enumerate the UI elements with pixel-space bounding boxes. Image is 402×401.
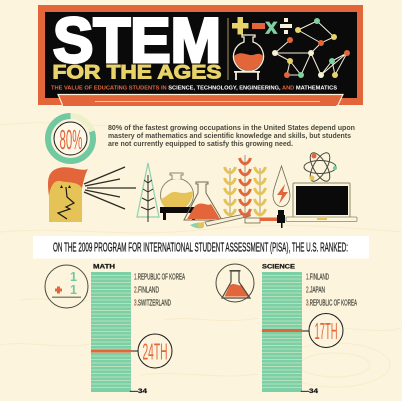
science label: SCIENCE	[262, 264, 296, 270]
paragraph: 80% of the fastest growing occupations in the United States depend upon	[108, 125, 355, 132]
science top three	[306, 272, 357, 308]
math rank callout: 24TH	[142, 338, 168, 364]
subtitle: for the ages: FOR THE AGES	[52, 62, 222, 84]
math symbols: x	[266, 16, 278, 38]
rays from face	[84, 167, 136, 209]
math striped bar	[91, 272, 131, 392]
math 34 marker: —34	[130, 388, 147, 395]
lower ribbon	[58, 94, 343, 106]
paragraph	[108, 125, 355, 148]
icon: paint brush	[190, 212, 251, 228]
icon: bunsen burner	[245, 166, 290, 228]
science top three: 2.JAPAN	[306, 284, 325, 294]
math top three: 2.FINLAND	[134, 284, 159, 294]
icon: round flask on stand	[234, 35, 264, 80]
icon: laptop	[286, 183, 357, 222]
network diagram	[272, 18, 350, 78]
math symbols	[232, 16, 292, 38]
science striped bar	[262, 272, 302, 392]
icon: face	[48, 167, 88, 222]
paragraph: are not currently equipped to satisfy this growing need.	[108, 141, 293, 148]
math top three	[134, 272, 185, 308]
tagline: THE VALUE OF EDUCATING STUDENTS IN SCIENCE, TECHNOLOGY, ENGINEERING, AND MATHEMATICS	[51, 86, 338, 92]
science 34 marker: —34	[301, 388, 318, 395]
title: STEM: STEM	[53, 6, 221, 76]
icon: addition: 1	[70, 269, 77, 284]
80% badge: 80%	[60, 124, 82, 155]
icon: atom	[304, 150, 337, 184]
math rank callout	[131, 334, 172, 368]
80% badge	[48, 116, 93, 161]
panel: math	[45, 264, 185, 395]
icon: round flask on table	[160, 173, 195, 220]
icon: tree	[137, 163, 159, 222]
science rank callout	[302, 314, 343, 348]
icon: addition	[45, 265, 88, 308]
math top three: 1.REPUBLIC OF KOREA	[134, 272, 185, 282]
icon: addition: 1	[70, 282, 77, 297]
math top three: 3.SWITZERLAND	[134, 298, 171, 308]
header banner	[38, 5, 363, 106]
panel: science	[216, 264, 357, 395]
science top three: 3.REPUBLIC OF KOREA	[306, 298, 357, 308]
paragraph: mastery of mathematics and scientific knowledge and skills, but students	[108, 133, 351, 140]
science top three: 1.FINLAND	[306, 272, 329, 282]
icon: conical flask	[184, 182, 222, 220]
science rank callout: 17TH	[314, 318, 338, 344]
icon: flask	[216, 264, 254, 302]
PISA heading band	[33, 236, 369, 258]
icon: wheat plants	[224, 155, 266, 216]
math label: MATH	[93, 264, 115, 270]
